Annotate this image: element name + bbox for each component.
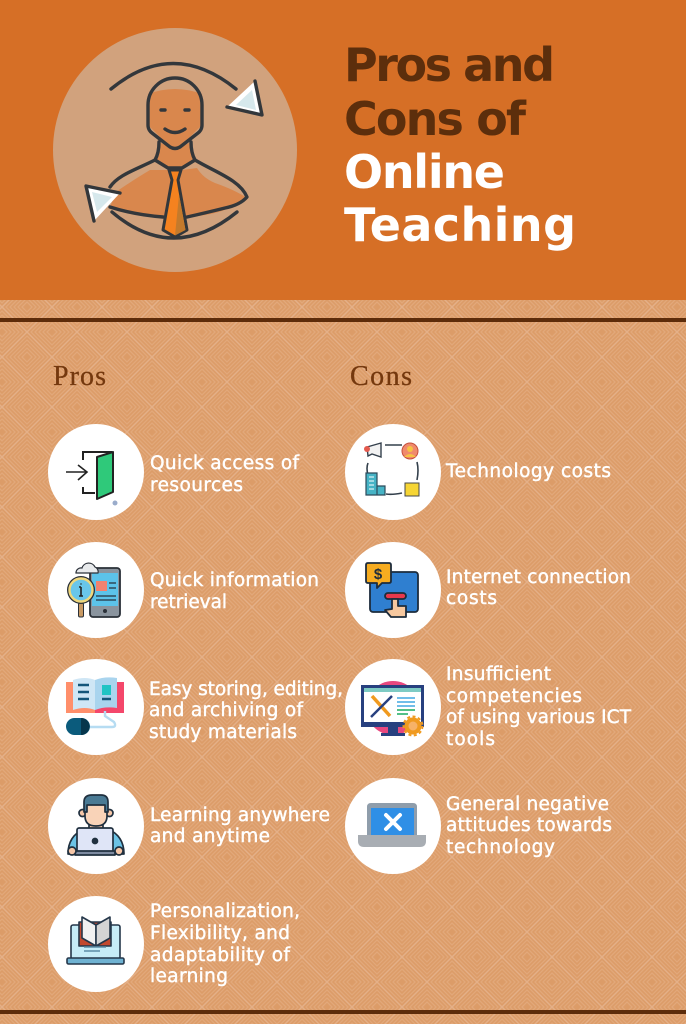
header illustration: person with rotating arrows <box>53 28 297 272</box>
icon: book and mouse <box>66 677 124 735</box>
text: Insufficient <box>446 664 551 685</box>
patterned background <box>0 300 686 1024</box>
text: Technology costs <box>445 461 611 482</box>
text: adaptability of <box>150 945 290 966</box>
item: Easy storing, editing, and archiving <box>48 659 343 755</box>
icon: business cycle <box>364 443 419 496</box>
item: Technology costs <box>345 424 611 520</box>
text: and anytime <box>150 826 270 847</box>
text: resources <box>150 475 243 496</box>
text: Personalization, <box>150 901 300 922</box>
item: Internet connection costs <box>345 542 631 638</box>
item: General negative attitudes <box>345 778 612 874</box>
item: Insufficient competencies <box>345 659 632 755</box>
heading: Pros: Pros <box>53 361 106 392</box>
icon: magnifier and tablet <box>67 563 120 617</box>
title: Teaching <box>344 198 576 252</box>
text <box>150 570 319 613</box>
title: Online <box>344 145 505 199</box>
text: study materials <box>149 722 297 743</box>
text: General negative <box>446 794 609 815</box>
text <box>150 901 300 987</box>
text: costs <box>446 588 497 609</box>
text: Easy storing, editing, <box>149 679 343 700</box>
text <box>150 453 299 496</box>
text: retrieval <box>150 592 227 613</box>
icon: laptop with X <box>358 803 426 847</box>
text: Learning anywhere <box>150 805 330 826</box>
icon: monitor with tools <box>361 681 424 736</box>
text: Quick information <box>150 570 319 591</box>
text: Quick access of <box>150 453 299 474</box>
title <box>344 38 576 252</box>
text: attitudes towards <box>446 815 612 836</box>
text: and archiving of <box>149 700 303 721</box>
icon: person with laptop <box>68 795 124 855</box>
text <box>150 805 330 847</box>
text <box>149 679 343 743</box>
item: Quick access of resources <box>48 424 299 520</box>
text: technology <box>446 837 555 858</box>
dollar sign on bubble: $ <box>374 566 383 583</box>
header band <box>0 0 686 300</box>
icon: book on laptop <box>67 917 124 964</box>
heading: Cons: Cons <box>350 361 412 392</box>
item: Quick information retrieval <box>48 542 319 638</box>
text: Flexibility, and <box>150 923 290 944</box>
text <box>446 794 612 858</box>
icon: door with arrow <box>66 452 118 506</box>
text: competencies <box>446 686 582 707</box>
text <box>446 664 632 750</box>
icon: payment click <box>366 563 418 617</box>
text: tools <box>446 729 495 750</box>
title: Cons of <box>344 92 527 146</box>
item: Personalization, Flexibility, adaptability <box>48 896 300 992</box>
text <box>446 567 631 609</box>
title: Pros and <box>344 38 555 92</box>
text: of using various ICT <box>446 707 632 728</box>
text: learning <box>150 966 228 987</box>
text: Internet connection <box>446 567 631 588</box>
item: Learning anywhere and anytime <box>48 778 330 874</box>
